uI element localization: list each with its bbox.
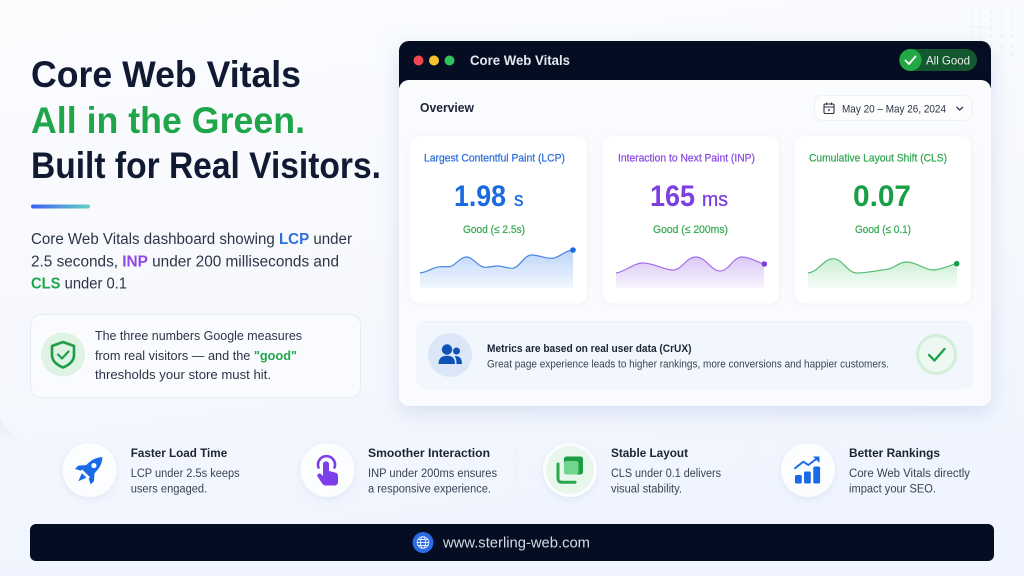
feature text: Faster Load Time (131, 446, 228, 460)
feature text: Stable Layout (611, 446, 688, 460)
icon: users (428, 333, 472, 377)
INP value: ms (702, 189, 728, 211)
panel: INP card: Interaction to Next Paint (INP) (618, 152, 755, 164)
feature text (611, 446, 721, 496)
feature text: LCP under 2.5s keeps (131, 468, 240, 480)
intro paragraph: Core Web Vitals dashboard showing LCP under (31, 231, 352, 248)
panel: LCP card: Largest Contentful Paint (LCP) (424, 152, 565, 164)
banner text: Great page experience leads to higher rankings, more conversions and happier customers. (487, 358, 889, 370)
window title bar: Core Web Vitals (470, 52, 570, 68)
feature: smoother interaction (300, 443, 497, 497)
date picker: May 20 – May 26, 2024 (842, 103, 946, 115)
CLS value: 0.07 (853, 180, 911, 213)
icon: rising bar chart (781, 443, 835, 497)
panel: dashboard window (399, 41, 991, 406)
panel: real user data banner (417, 322, 972, 388)
icon: check circle (918, 336, 956, 374)
feature text: a responsive experience. (368, 484, 491, 496)
feature text (131, 446, 240, 496)
icon: globe (412, 532, 434, 553)
website url: www.sterling-web.com (442, 534, 590, 551)
footer bar (30, 524, 994, 561)
title (31, 54, 381, 186)
LCP value: 1.98 (454, 180, 506, 213)
title: Core Web Vitals (31, 54, 301, 95)
status badge: all good: All Good (926, 53, 970, 67)
banner text (487, 343, 889, 370)
feature text: Better Rankings (849, 446, 940, 460)
feature text: visual stability. (611, 484, 682, 496)
callout text: thresholds your store must hit. (95, 367, 271, 382)
intro paragraph (31, 231, 352, 292)
feature text: INP under 200ms ensures (368, 468, 497, 480)
panel: CLS card (795, 136, 971, 304)
feature: stable layout (543, 443, 721, 497)
date picker (814, 96, 972, 120)
status badge: all good (899, 49, 977, 71)
callout text (95, 328, 302, 382)
feature text (849, 446, 970, 496)
intro paragraph: CLS under 0.1 (31, 276, 127, 292)
title: All in the Green. (31, 100, 305, 141)
window title bar (399, 41, 991, 95)
panel: INP card: Good (≤ 200ms) (653, 224, 728, 236)
feature text: impact your SEO. (849, 484, 936, 496)
title: Built for Real Visitors. (31, 145, 381, 186)
overview heading: Overview (420, 100, 475, 115)
CLS status: Good (≤ 0.1) (855, 224, 911, 236)
feature text: users engaged. (131, 484, 207, 496)
icon: shield check (41, 332, 85, 376)
panel: CLS card: Cumulative Layout Shift (CLS) (809, 152, 947, 164)
intro paragraph: 2.5 seconds, INP under 200 milliseconds and (31, 254, 339, 270)
LCP sparkline (420, 247, 576, 288)
title accent rule (31, 204, 90, 208)
callout text: from real visitors — and the "good" (95, 348, 297, 363)
feature text: Smoother Interaction (368, 446, 490, 460)
icon: calendar (824, 102, 834, 114)
CLS sparkline (808, 259, 960, 288)
panel: LCP card (410, 136, 587, 304)
INP value (650, 180, 728, 213)
callout: good thresholds (30, 314, 360, 398)
callout text: The three numbers Google measures (95, 328, 302, 343)
feature: faster load time (63, 443, 240, 497)
panel: INP card (603, 136, 779, 304)
feature text: CLS under 0.1 delivers (611, 468, 721, 480)
INP value: 165 (650, 180, 695, 213)
feature text: Core Web Vitals directly (849, 468, 970, 480)
LCP value: s (514, 189, 524, 211)
banner text: Metrics are based on real user data (CrUX) (487, 343, 692, 355)
panel: LCP card: Good (≤ 2.5s) (463, 224, 525, 236)
icon: layered squares (543, 443, 597, 497)
icon: rocket (63, 443, 117, 497)
icon: tap hand (300, 443, 354, 497)
feature: better rankings (781, 443, 970, 497)
feature text (368, 446, 497, 496)
INP sparkline (616, 257, 767, 288)
